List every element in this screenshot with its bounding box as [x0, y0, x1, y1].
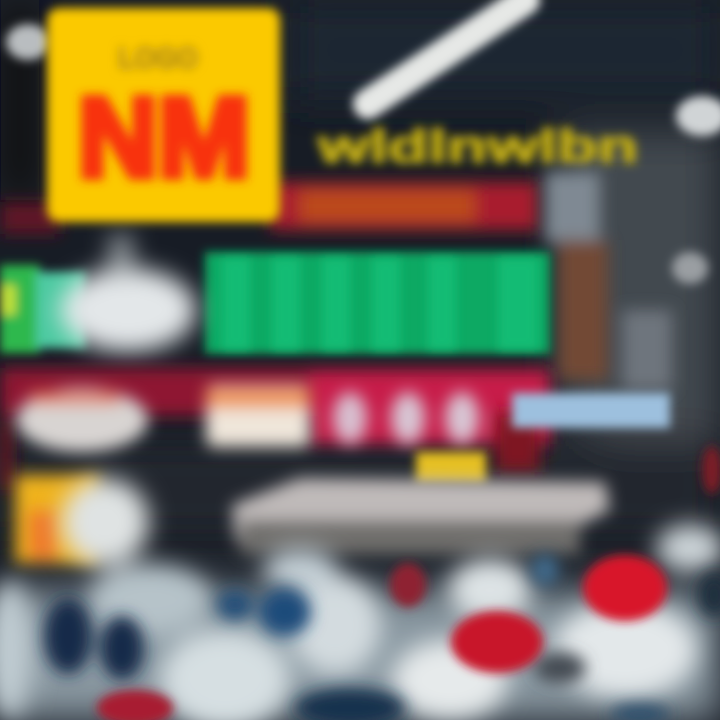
navy accents	[44, 554, 720, 720]
yellow and orange box	[15, 475, 100, 563]
ceiling light tube	[6, 0, 720, 284]
yellow NM sign	[47, 8, 280, 222]
green band stripes	[222, 258, 538, 350]
white counter	[232, 478, 610, 554]
red fascia band	[0, 182, 538, 234]
red display band	[0, 368, 550, 490]
blue label panel	[512, 393, 670, 428]
yellow tag	[416, 452, 486, 484]
green product band	[0, 252, 550, 354]
white round shapes foreground	[0, 478, 720, 720]
sign letters NM: NM	[78, 75, 250, 200]
small sign text: LOGO	[118, 42, 198, 75]
gold sign lettering: wldlnwlbn	[317, 120, 638, 172]
grey and brown pillar	[545, 172, 672, 390]
red round shapes	[97, 446, 720, 720]
display items	[16, 385, 540, 472]
white central blob	[60, 235, 196, 352]
